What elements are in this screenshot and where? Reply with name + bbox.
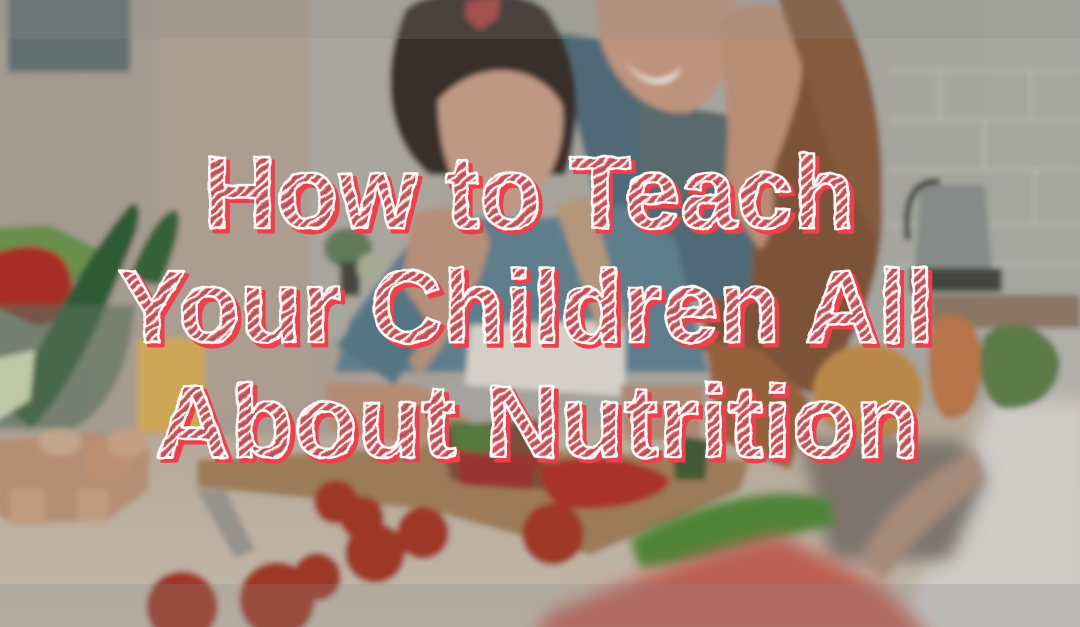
title line 2: Your Children All: Your Children All: [122, 253, 938, 368]
title line 1: How to Teach: How to Teach: [207, 139, 859, 254]
title line 2: Your Children All: Your Children All: [118, 249, 934, 364]
background photo: knife: [197, 490, 255, 558]
background photo: left bowl with vegetables: [0, 204, 205, 433]
title line 1: How to Teach: How to Teach: [203, 135, 855, 250]
title: [118, 135, 938, 483]
title line 3: About Nutrition: About Nutrition: [155, 364, 919, 479]
background photo: tabletop: [0, 400, 1080, 627]
title line 3: About Nutrition: About Nutrition: [159, 368, 923, 483]
background photo: cutting board with food: [197, 420, 750, 555]
background photo: plant: [324, 228, 387, 296]
translucent top band: [0, 0, 1080, 39]
background photo: right vegetables: [530, 315, 1060, 627]
background photo: child: [325, 0, 708, 452]
translucent bottom band: [0, 584, 1080, 627]
background photo: kettle: [907, 182, 1002, 292]
background photo: egg carton: [0, 429, 150, 525]
background photo: mother: [556, 0, 882, 395]
background photo: tomatoes: [146, 480, 584, 627]
